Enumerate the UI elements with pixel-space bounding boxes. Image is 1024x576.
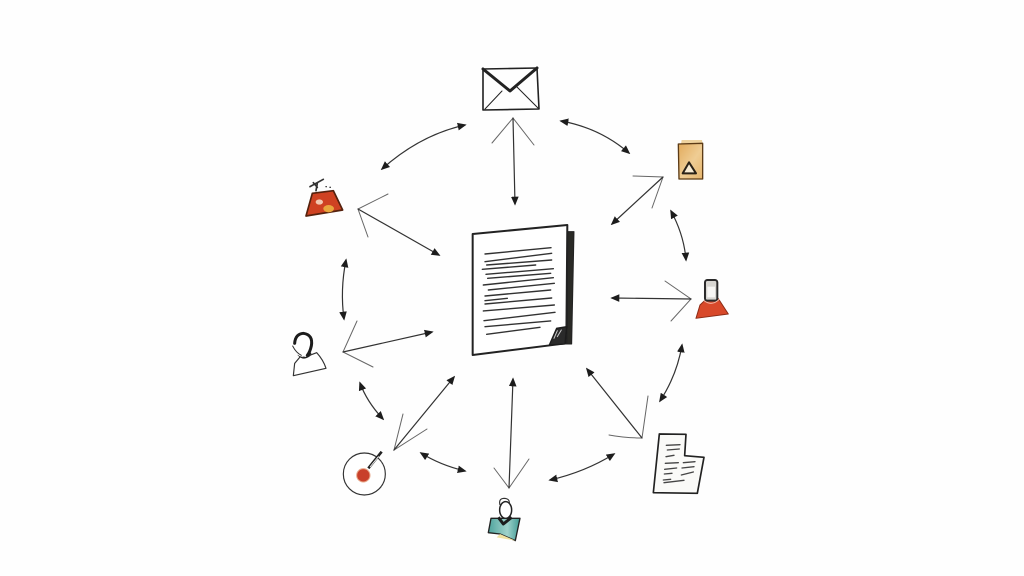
- curved arrow: person and pot: [342, 260, 346, 319]
- icon: orange card with triangle: [678, 140, 703, 179]
- central document: [473, 225, 574, 355]
- document text lines: [482, 248, 555, 334]
- curved arrow: envelope and card: [561, 121, 629, 153]
- icon: envelope: [483, 68, 539, 110]
- curved arrow: pot and envelope: [382, 125, 465, 169]
- curved arrow: card and bell: [671, 211, 686, 260]
- curved arrow: text page and reader: [550, 454, 614, 480]
- icon: red volcano pot with plant: [306, 179, 343, 216]
- icon: text page with notch: [653, 434, 704, 493]
- curved arrow: bell and text page: [660, 345, 682, 401]
- curved arrow: target and person: [360, 383, 383, 419]
- arrow: reader to document: [494, 379, 529, 488]
- arrow: card to document: [612, 176, 663, 224]
- arrow: person to document: [343, 321, 432, 367]
- arrow: pot to document: [358, 194, 439, 255]
- icon: red bell with handle: [696, 280, 728, 318]
- icon: target with pen: [343, 452, 385, 495]
- curved arrow: reader and target: [421, 453, 465, 471]
- arrow: envelope to document: [492, 118, 534, 204]
- document back page spine: [563, 232, 574, 344]
- document folded corner: [549, 327, 567, 345]
- ring arrows between icons: [342, 121, 686, 480]
- icon: person bust outline: [293, 333, 326, 376]
- arrow: bell to document: [612, 281, 691, 321]
- arrow: text page to document: [587, 369, 648, 438]
- arrow: target to document: [394, 377, 454, 450]
- hub arrows: [343, 118, 691, 488]
- document front page: [473, 225, 567, 355]
- icon: person with teal book: [488, 498, 520, 541]
